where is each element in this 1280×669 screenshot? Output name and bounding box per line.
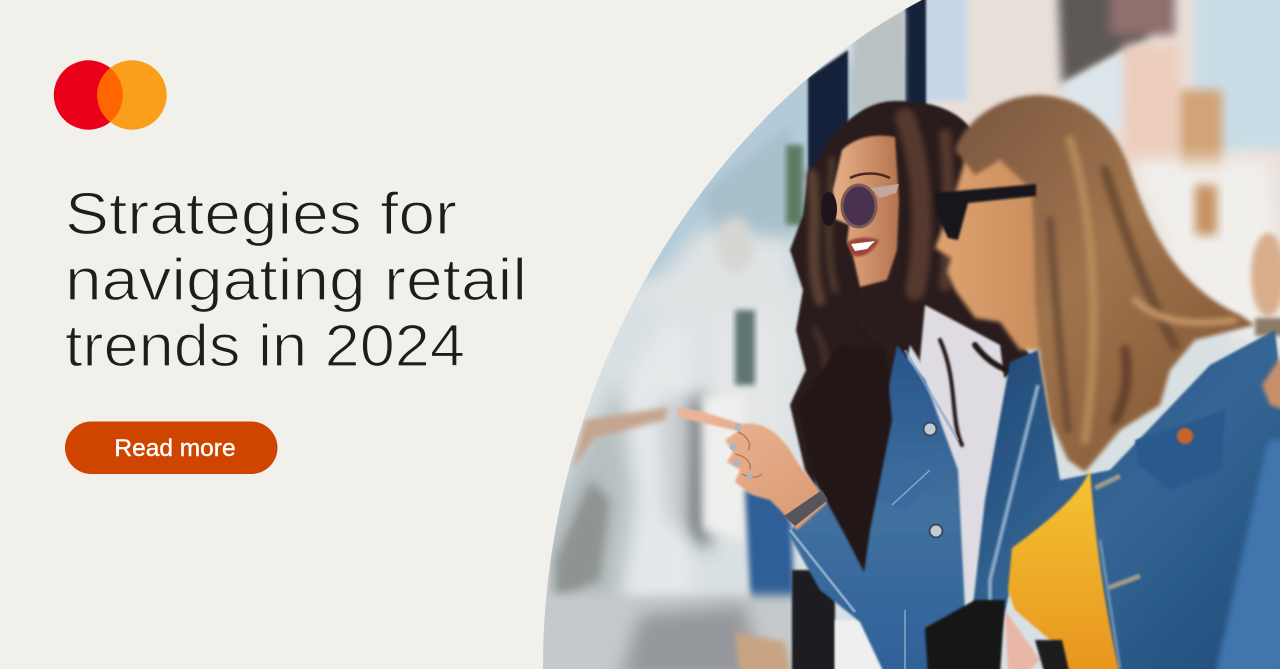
left woman: white shirt [918, 304, 1006, 446]
left woman: face [833, 136, 899, 287]
window reflections [540, 125, 803, 669]
left woman: neck shadow [855, 250, 905, 345]
left woman: jacket buttons and pocket [790, 350, 958, 669]
left woman: sunglasses [821, 184, 899, 227]
left woman: jacket [788, 345, 965, 669]
right woman: hair strands [1050, 140, 1235, 440]
right woman: neck and face [935, 150, 1048, 350]
left woman: finger lines and nails [730, 424, 762, 479]
left woman: bracelet [784, 490, 828, 526]
photo: two women shopping [540, 0, 1280, 669]
dark window frames [792, 0, 926, 669]
street background [540, 0, 1280, 669]
left woman: smile [847, 238, 879, 256]
right woman: yellow top [1008, 470, 1120, 669]
left woman: eyebrow [850, 174, 890, 178]
left woman: teeth [851, 241, 875, 251]
left woman: long curls over jacket [798, 345, 892, 572]
black bag and shopping bag [925, 600, 1070, 669]
left woman: pointing hand [677, 408, 827, 530]
left woman: hair highlights [812, 118, 949, 440]
left woman: hair [788, 99, 1030, 487]
right woman: sunglasses [935, 184, 1036, 240]
title: trends in 2024 [65, 313, 465, 379]
title: navigating retail [65, 247, 527, 313]
button: read more [65, 422, 278, 474]
logo: overlapping circles [54, 60, 167, 130]
title [65, 181, 527, 379]
right woman: jacket details [990, 350, 1280, 669]
left woman: hair strands over shirt [936, 336, 1006, 448]
button: read more: Read more [114, 435, 236, 462]
right woman: jacket [965, 330, 1280, 669]
right woman: hair [955, 95, 1255, 472]
title: Strategies for [65, 181, 457, 247]
